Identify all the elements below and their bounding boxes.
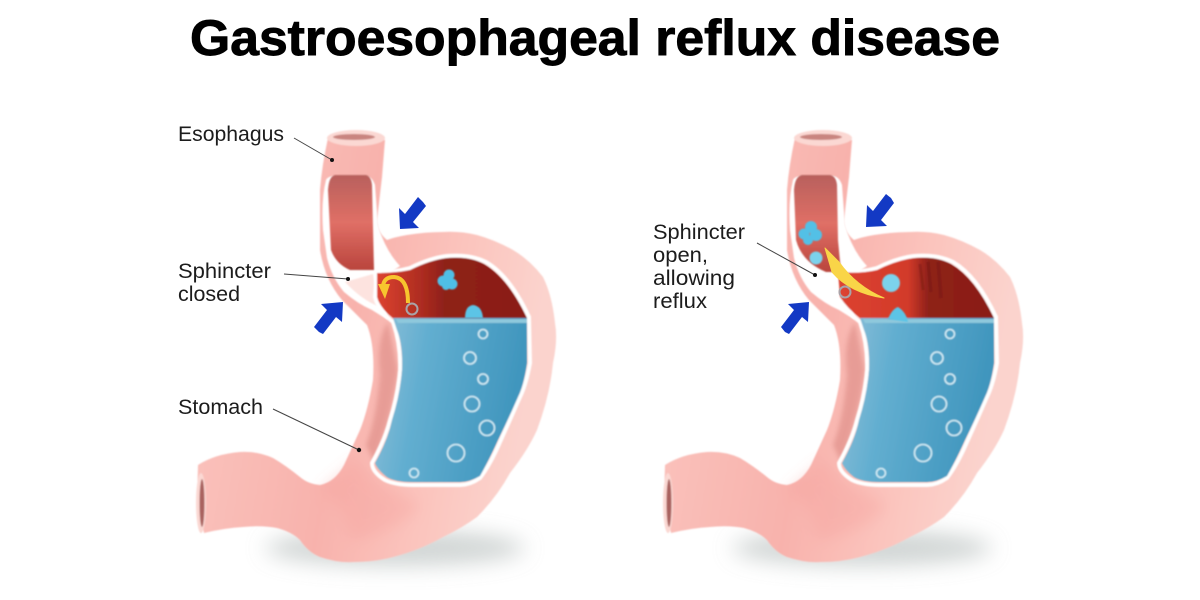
gas bubble — [840, 286, 850, 298]
blue arrow: upper — [866, 194, 894, 227]
esophagus lining and open sphincter — [789, 176, 867, 320]
label: Sphincter open, allowing reflux — [653, 221, 745, 313]
label: Sphincter closed: Sphincter — [178, 260, 271, 283]
acid droplets — [438, 270, 483, 318]
leader: Stomach — [273, 409, 361, 452]
blue arrow: lower — [314, 302, 343, 334]
stomach cavity and acid — [372, 256, 530, 485]
gas bubble — [406, 304, 418, 314]
blue arrow: lower — [781, 302, 809, 334]
panel: sphincter closed stomach — [178, 123, 556, 566]
yellow arrowhead — [378, 284, 390, 299]
label: Sphincter closed: closed — [178, 283, 240, 306]
leader: Sphincter closed — [284, 274, 350, 281]
esophagus muscle — [328, 175, 374, 270]
stomach cavity and acid — [838, 256, 997, 485]
label: Sphincter open, allowing reflux: reflux — [653, 290, 708, 313]
stomach body — [663, 130, 1023, 566]
esophagus lining and closed sphincter — [322, 176, 400, 320]
leader: Esophagus — [294, 138, 334, 162]
label: Sphincter open, allowing reflux: allowing — [653, 267, 735, 290]
sphincter tissue — [345, 274, 378, 306]
label: Sphincter closed — [178, 260, 271, 306]
stomach body — [196, 130, 556, 566]
label: Stomach: Stomach — [178, 396, 263, 419]
title: Gastroesophageal reflux disease — [190, 10, 1000, 66]
esophagus muscle with reflux channel — [794, 175, 841, 272]
leader: Sphincter open — [757, 243, 817, 277]
reflux arrow: yellow curved — [383, 277, 408, 303]
acid droplets — [798, 221, 908, 322]
blue arrow: upper — [399, 197, 426, 229]
label: Sphincter open, allowing reflux: Sphincter — [653, 221, 745, 244]
reflux arrow: yellow straight — [825, 248, 884, 298]
label: Esophagus: Esophagus — [178, 123, 284, 146]
label: Sphincter open, allowing reflux: open, — [653, 244, 708, 267]
panel: sphincter open stomach — [653, 130, 1023, 566]
